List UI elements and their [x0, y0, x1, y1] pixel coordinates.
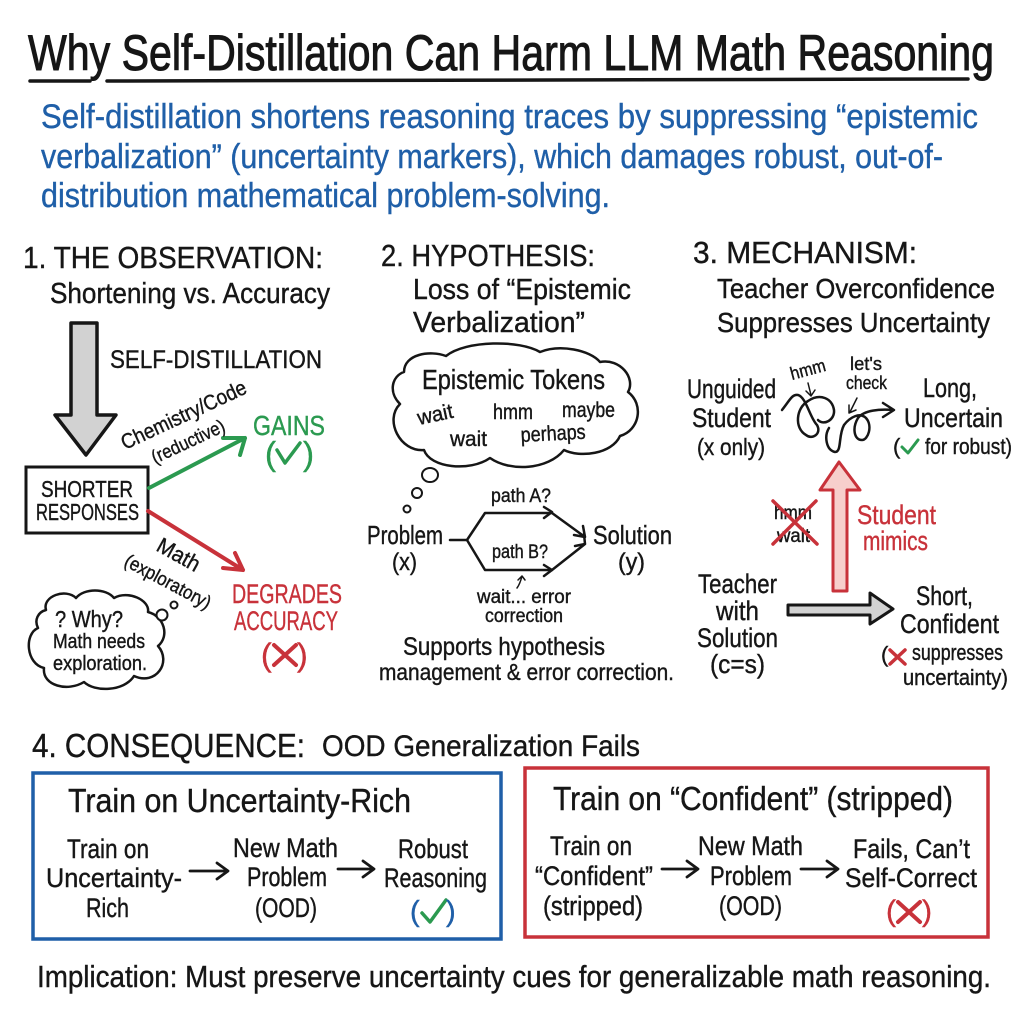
panel 2: hypothesis: [367, 238, 674, 685]
self-distillation label: SELF-DISTILLATION: [110, 346, 322, 374]
heading 2: [381, 238, 631, 339]
heading 2: Verbalization”: [413, 307, 585, 339]
robust note: [893, 434, 1012, 459]
gains: GAINS: [253, 410, 325, 441]
outcome: robust reasoning: (: [410, 896, 420, 928]
chemistry label: Chemistry/Code: [117, 376, 250, 455]
shorter responses box: SHORTER: [41, 476, 133, 502]
path labels: [476, 486, 572, 627]
heading 1: Shortening vs. Accuracy: [50, 278, 330, 310]
pink up arrow: [820, 462, 860, 591]
step: new math problem: [698, 831, 803, 921]
robust note: (: [893, 434, 901, 459]
unguided student: (x only): [697, 434, 765, 460]
summary text: verbalization” (uncertainty markers), which damages robust, out-of-: [41, 138, 943, 176]
step: new math problem: New Math: [233, 833, 338, 863]
panel: uncertainty-rich: [33, 773, 501, 939]
degrades accuracy: DEGRADES: [232, 579, 342, 609]
short confident: Confident: [900, 609, 999, 639]
outcome: fails: [845, 834, 977, 928]
arrow: [801, 861, 838, 877]
thought bubbles: [404, 468, 438, 512]
teacher: [697, 569, 778, 679]
outcome: robust reasoning: ): [446, 896, 456, 928]
panel 3: mechanism: [687, 235, 1012, 690]
summary text: distribution mathematical problem-solving.: [41, 177, 610, 215]
suppresses note: [881, 640, 1008, 690]
thought cloud: epistemic tokens: maybe: [562, 399, 615, 422]
squiggle labels: check: [846, 373, 888, 393]
teacher: with: [715, 596, 759, 626]
teacher: Teacher: [698, 569, 777, 599]
arrow: [190, 863, 228, 879]
panel heading: Train on “Confident” (stripped): [553, 780, 953, 817]
arrow: [662, 861, 698, 877]
supports caption: management & error correction.: [379, 659, 674, 685]
outcome: fails: Self-Correct: [845, 863, 977, 893]
crossed out tokens: wait: [776, 526, 811, 547]
step: new math problem: Problem: [247, 862, 327, 892]
problem: Problem: [367, 520, 443, 550]
suppresses note: suppresses: [912, 640, 1003, 665]
squiggle arrow: [782, 383, 894, 452]
thought cloud: why: Math needs: [53, 631, 145, 653]
step: new math problem: New Math: [698, 831, 803, 861]
teacher: Solution: [697, 623, 778, 653]
outcome: robust reasoning: [384, 834, 487, 928]
unguided student: Unguided: [687, 374, 776, 404]
thought cloud: why: ? Why?: [55, 606, 123, 632]
step: new math problem: (OOD): [255, 893, 317, 923]
arrow: degrades: [148, 511, 243, 570]
robust note: for robust): [925, 434, 1012, 459]
section 4 heading: 4. CONSEQUENCE:: [32, 727, 305, 764]
gains: [253, 410, 325, 472]
solution: [593, 520, 672, 576]
crossed out tokens: hmm: [774, 503, 812, 524]
thought cloud: epistemic tokens: wait: [449, 428, 487, 451]
icon: down arrow: [55, 323, 116, 455]
path labels: path A?: [491, 486, 551, 507]
heading 3: Teacher Overconfidence: [717, 273, 995, 304]
long uncertain: Long,: [923, 373, 977, 403]
suppresses note: uncertainty): [903, 665, 1008, 690]
path labels: wait... error: [476, 587, 572, 608]
squiggle labels: let's: [850, 354, 882, 374]
shorter responses box: RESPONSES: [36, 499, 139, 525]
solution: Solution: [593, 520, 672, 550]
outcome: fails: ): [922, 895, 932, 928]
heading 2: 2. HYPOTHESIS:: [381, 238, 595, 273]
summary text: [41, 98, 978, 215]
math label: Math: [153, 533, 205, 577]
heading 2: Loss of “Epistemic: [413, 274, 631, 306]
arrow: gains: [149, 438, 245, 488]
panel: confident stripped: [525, 768, 988, 937]
step: train: [535, 831, 653, 921]
problem: (x): [392, 549, 417, 576]
step: new math problem: (OOD): [719, 891, 782, 921]
thought cloud: epistemic tokens: perhaps: [520, 421, 586, 447]
student mimics: mimics: [863, 526, 928, 556]
step: train: Train on: [550, 831, 632, 861]
short confident: [900, 581, 999, 639]
section 4 heading: [32, 727, 640, 764]
section 4 heading: OOD Generalization Fails: [322, 730, 640, 763]
panel 1: the observation: [23, 240, 342, 689]
step: train: [46, 834, 182, 923]
step: train: Train on: [67, 834, 149, 864]
problem: [367, 520, 443, 576]
degrades accuracy: (: [261, 637, 272, 673]
short confident: Short,: [916, 581, 973, 611]
step: train: (stripped): [543, 891, 643, 921]
outcome: robust reasoning: Reasoning: [384, 863, 487, 893]
suppresses note: (: [881, 642, 889, 667]
gains: (: [265, 435, 276, 472]
degrades accuracy: ACCURACY: [234, 606, 338, 636]
thought cloud: why: exploration.: [53, 653, 147, 675]
step: train: Uncertainty-: [46, 863, 182, 893]
thought cloud: epistemic tokens: wait: [414, 400, 455, 430]
outcome: fails: Fails, Can’t: [853, 834, 970, 864]
long uncertain: Uncertain: [904, 403, 1003, 433]
supports caption: [379, 633, 674, 685]
heading 3: 3. MECHANISM:: [693, 235, 917, 270]
step: new math problem: [233, 833, 338, 923]
heading 1: [23, 240, 330, 310]
squiggle labels: [788, 354, 888, 393]
path labels: correction: [485, 606, 563, 627]
step: train: “Confident”: [535, 861, 653, 891]
panel heading: Train on Uncertainty-Rich: [68, 782, 411, 819]
path labels: path B?: [492, 542, 548, 563]
math label: [121, 533, 214, 614]
heading 3: [693, 235, 995, 338]
step: new math problem: Problem: [710, 861, 792, 891]
shorter responses box: [26, 467, 148, 533]
gray right arrow: [788, 593, 893, 624]
outcome: fails: (: [886, 895, 896, 928]
unguided student: Student: [692, 403, 771, 433]
degrades accuracy: [232, 579, 342, 673]
thought cloud: epistemic tokens: Epistemic Tokens: [422, 364, 605, 395]
solution: (y): [618, 549, 645, 576]
thought cloud: epistemic tokens: hmm: [493, 401, 533, 424]
math label: (exploratory): [121, 551, 214, 614]
long uncertain: [904, 373, 1003, 433]
heading 3: Suppresses Uncertainty: [717, 307, 990, 338]
thought cloud: why: [29, 590, 178, 689]
supports caption: Supports hypothesis: [403, 633, 605, 661]
arrow: [338, 861, 374, 877]
teacher: (c=s): [710, 649, 765, 679]
heading 1: 1. THE OBSERVATION:: [23, 240, 323, 275]
thought cloud: epistemic tokens: [393, 343, 638, 467]
student mimics: [857, 500, 936, 556]
chemistry label: (reductive): [148, 416, 229, 469]
student mimics: Student: [857, 500, 936, 530]
degrades accuracy: ): [297, 637, 308, 673]
unguided student: [687, 374, 776, 460]
squiggle labels: hmm: [788, 355, 828, 384]
outcome: robust reasoning: Robust: [398, 834, 468, 864]
step: train: Rich: [86, 893, 129, 923]
crossed out tokens: [773, 501, 817, 547]
path diagram: [450, 507, 585, 588]
gains: ): [303, 435, 314, 472]
